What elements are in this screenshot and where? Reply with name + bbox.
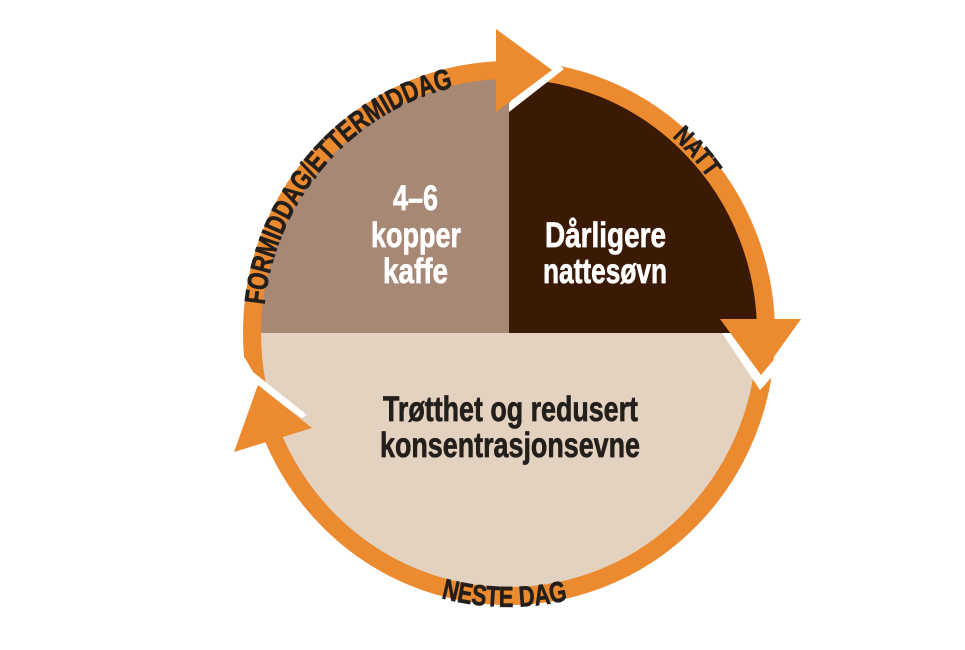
text: Trøtthet og redusert konsentrasjonsevne: Trøtthet og redusert [383,390,638,429]
text: Trøtthet og redusert konsentrasjonsevne [380,390,640,465]
arrow gap: right [722,333,782,390]
arrow: top [496,29,552,112]
text: 4–6 kopper kaffe: kopper [371,216,461,255]
arrow gap: top [509,56,564,112]
text: Trøtthet og redusert konsentrasjonsevne: konsentrasjonsevne [380,426,640,465]
arrow: left [234,385,312,452]
label: NATT: NATT [672,124,723,175]
text: Dårligere nattesøvn: nattesøvn [543,252,667,291]
ring: orange cycle [252,70,766,596]
label: FORMIDDAG/ETTERMIDDAG: FORMIDDAG/ETTERMIDDAG [244,69,452,304]
text: Dårligere nattesøvn [543,216,667,291]
label: NESTE DAG: NESTE DAG [442,578,566,608]
text: Dårligere nattesøvn: Dårligere [545,216,666,255]
panel: upper right quadrant, poor sleep [509,70,766,333]
text: 4–6 kopper kaffe: 4–6 [393,179,438,218]
panel: lower half, fatigue [252,333,766,596]
arrow gap: left [225,356,307,452]
panel: upper left quadrant, coffee [252,70,509,333]
text: 4–6 kopper kaffe: kaffe [383,252,448,291]
text: 4–6 kopper kaffe [371,179,461,291]
arrow: right [720,319,801,375]
